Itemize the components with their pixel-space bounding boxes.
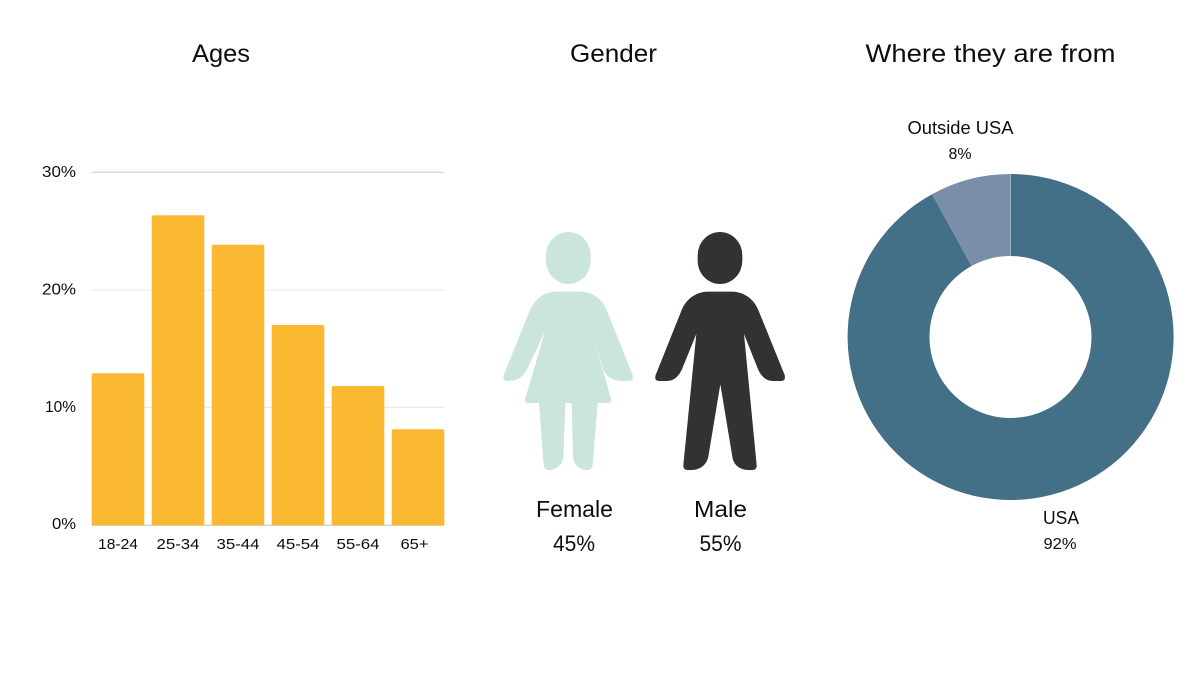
bars	[92, 215, 444, 525]
label: female: Female	[536, 496, 613, 522]
panel: gender	[503, 40, 785, 556]
label: USA: 92%	[1044, 536, 1076, 553]
x axis labels: 45-54	[276, 536, 320, 553]
label: male: 55%	[700, 531, 742, 556]
label: female	[536, 496, 613, 556]
x axis labels: 35-44	[216, 536, 260, 553]
panel: ages	[42, 40, 444, 553]
heading: gender: Gender	[570, 40, 657, 68]
donut chart: origin	[848, 174, 1174, 500]
x axis labels: 65+	[400, 536, 429, 553]
label: USA	[1043, 508, 1079, 553]
x axis labels: 18-24	[98, 536, 138, 553]
x axis labels	[98, 536, 429, 553]
y axis labels: 20%	[42, 282, 76, 298]
segment: USA 92%	[848, 174, 1174, 500]
x axis labels: 25-34	[156, 536, 200, 553]
x axis labels: 55-64	[336, 536, 380, 553]
y axis labels: 30%	[42, 164, 76, 181]
label: outside USA: Outside USA	[908, 118, 1014, 138]
y axis labels: 10%	[45, 399, 76, 416]
bar chart: age distribution	[42, 164, 444, 553]
label: outside USA: 8%	[948, 146, 972, 163]
label: female: 45%	[553, 531, 595, 556]
segment: outside USA 8%	[932, 174, 1010, 266]
icon: female figure	[503, 232, 633, 470]
label: outside USA	[908, 118, 1014, 163]
heading: ages: Ages	[192, 40, 250, 68]
panel: where they are from	[848, 40, 1174, 553]
y axis labels: 0%	[52, 516, 76, 533]
label: male	[694, 496, 747, 556]
label: USA: USA	[1043, 508, 1079, 528]
y axis labels	[42, 164, 76, 533]
icon: male figure	[655, 232, 785, 470]
heading: where they are from: Where they are from	[866, 40, 1116, 68]
label: male: Male	[694, 496, 747, 522]
